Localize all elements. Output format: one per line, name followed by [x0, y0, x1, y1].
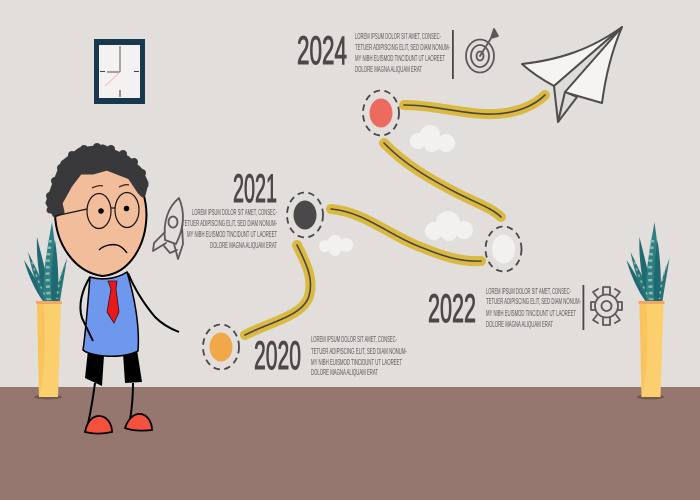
- text block 2021: TETUER ADIPISCING ELIT, SED DIAM NONUM-: [182, 219, 277, 228]
- text block 2024: DOLORE MAGNA ALIQUAM ERAT: [355, 65, 422, 74]
- icon: target: [466, 29, 498, 72]
- timeline path: 2020 to 2021: [245, 245, 311, 335]
- text block 2020: DOLORE MAGNA ALIQUAM ERAT: [311, 368, 378, 377]
- year 2020: 2020: [254, 334, 301, 378]
- text block 2022: [486, 287, 581, 329]
- year 2022: 2022: [428, 287, 476, 331]
- text: 2021: [233, 167, 277, 211]
- cloud: right: [425, 211, 473, 241]
- floor: [0, 387, 700, 500]
- text block 2021: MY NIBH EUISMOD TINCIDUNT UT LAOREET: [187, 230, 277, 239]
- milestone marker 2024: [363, 90, 399, 136]
- text block 2024: MY NIBH EUISMOD TINCIDUNT UT LAOREET: [355, 54, 445, 63]
- divider 2024: [452, 30, 454, 79]
- hair: [48, 147, 146, 215]
- year 2024: 2024: [297, 29, 347, 73]
- timeline path: 2024 to plane: [404, 95, 545, 114]
- icon: rocket: [153, 198, 183, 259]
- text block 2024: [355, 32, 450, 74]
- cloud: lower: [319, 235, 353, 256]
- arms: [80, 273, 179, 341]
- text block 2020: [311, 335, 407, 377]
- tie: [107, 281, 119, 323]
- shoes: [85, 414, 152, 434]
- icon: gear: [591, 287, 622, 325]
- text block 2021: DOLORE MAGNA ALIQUAM ERAT: [210, 241, 277, 250]
- text block 2020: TETUER ADIPISCING ELIT, SED DIAM NONUM-: [311, 347, 407, 356]
- timeline path: 2022 to 2024: [384, 143, 501, 217]
- plant: right: [626, 222, 670, 400]
- text block 2022: LOREM IPSUM DOLOR SIT AMET, CONSEC-: [486, 287, 571, 296]
- divider 2022: [582, 285, 584, 330]
- plant: left: [24, 222, 67, 400]
- character: man with glasses: [46, 143, 179, 434]
- milestone marker 2022: [486, 226, 522, 272]
- text block 2024: LOREM IPSUM DOLOR SIT AMET, CONSEC-: [355, 32, 441, 41]
- head: [55, 160, 146, 276]
- legs: [88, 383, 133, 424]
- text block 2020: MY NIBH EUISMOD TINCIDUNT UT LAOREET: [311, 358, 402, 367]
- milestone marker 2020: [203, 324, 239, 370]
- text block 2024: TETUER ADIPISCING ELIT, SED DIAM NONUM-: [355, 43, 450, 52]
- text block 2022: MY NIBH EUISMOD TINCIDUNT UT LAOREET: [486, 309, 576, 318]
- eyebrows: [92, 185, 129, 188]
- timeline path: 2021 to 2022: [331, 209, 481, 261]
- glasses: [55, 192, 139, 228]
- text block 2022: TETUER ADIPISCING ELIT, SED DIAM NONUM-: [486, 297, 581, 306]
- wall background: [0, 0, 700, 388]
- shirt: [83, 272, 138, 356]
- text block 2021: LOREM IPSUM DOLOR SIT AMET, CONSEC-: [192, 208, 277, 217]
- text block 2021: [182, 208, 277, 250]
- cloud: upper: [410, 125, 455, 152]
- mouth: [99, 245, 127, 253]
- text block 2022: DOLORE MAGNA ALIQUAM ERAT: [486, 320, 553, 329]
- hair curls: [46, 143, 148, 214]
- icon: paper plane: [522, 27, 622, 122]
- icon: wall clock: [94, 39, 145, 104]
- eyes: [98, 208, 104, 214]
- milestone marker 2021: [287, 192, 323, 238]
- text block 2020: LOREM IPSUM DOLOR SIT AMET, CONSEC-: [311, 335, 397, 344]
- shorts: [85, 350, 142, 386]
